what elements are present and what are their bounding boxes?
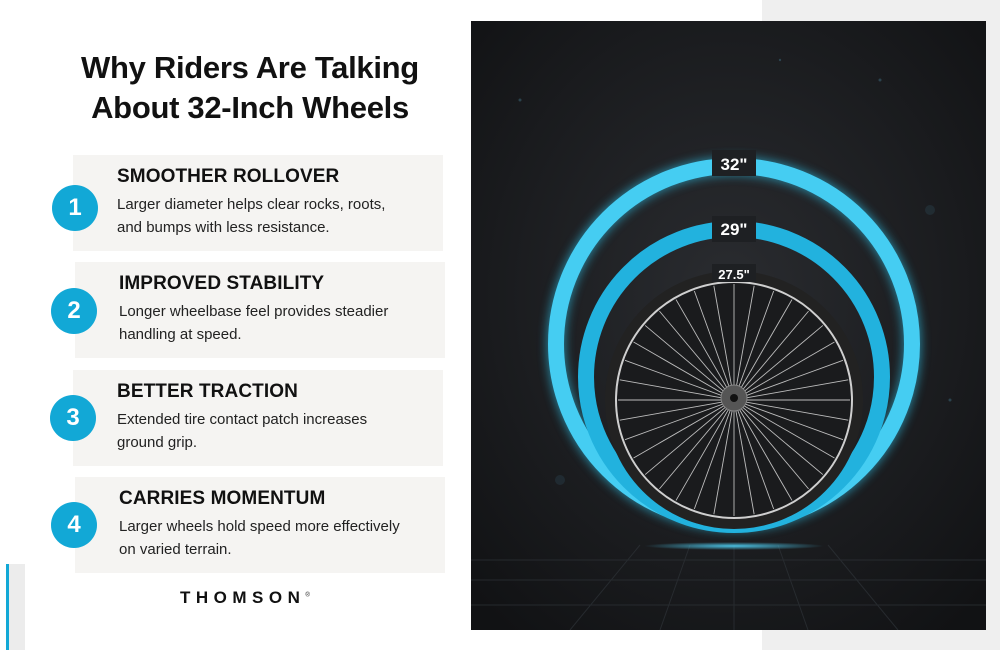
- card 3: [73, 370, 443, 466]
- wheel 27.5: [610, 264, 858, 524]
- badge 2: [51, 288, 97, 334]
- ring 29: 29": [721, 220, 747, 239]
- card 4: [75, 477, 445, 573]
- card 3: ground grip.: [117, 434, 197, 451]
- card 2: handling at speed.: [119, 326, 242, 343]
- badge 1: 1: [68, 194, 82, 221]
- badge 4: 4: [67, 511, 81, 538]
- card 1: Larger diameter helps clear rocks, roots,: [117, 196, 385, 213]
- card 4: CARRIES MOMENTUM: [119, 488, 325, 509]
- card 3: BETTER TRACTION: [117, 381, 298, 402]
- wheel comparison panel: [471, 21, 986, 630]
- title: Why Riders Are Talking: [81, 50, 419, 85]
- badge 2: 2: [67, 297, 81, 324]
- card 1: [73, 155, 443, 251]
- card 3: Extended tire contact patch increases: [117, 411, 367, 428]
- floor glow: [644, 542, 824, 550]
- card 2: IMPROVED STABILITY: [119, 273, 324, 294]
- badge 4: [51, 502, 97, 548]
- title: [81, 50, 419, 125]
- ring 32: 32": [721, 155, 747, 174]
- ring 32: [556, 150, 912, 522]
- badge 3: 3: [66, 404, 80, 431]
- card 1: and bumps with less resistance.: [117, 219, 330, 236]
- title: About 32-Inch Wheels: [91, 90, 409, 125]
- logo: THOMSON®: [180, 588, 310, 607]
- wheel 27.5: 27.5": [718, 267, 750, 282]
- card 4: on varied terrain.: [119, 541, 232, 558]
- card 2: Longer wheelbase feel provides steadier: [119, 303, 388, 320]
- card 4: Larger wheels hold speed more effectively: [119, 518, 400, 535]
- right gray strip: [762, 0, 1000, 650]
- badge 1: [52, 185, 98, 231]
- ring 29: [586, 216, 882, 525]
- card 1: SMOOTHER ROLLOVER: [117, 166, 339, 187]
- bottom left accent bar: [6, 564, 25, 650]
- card 2: [75, 262, 445, 358]
- badge 3: [50, 395, 96, 441]
